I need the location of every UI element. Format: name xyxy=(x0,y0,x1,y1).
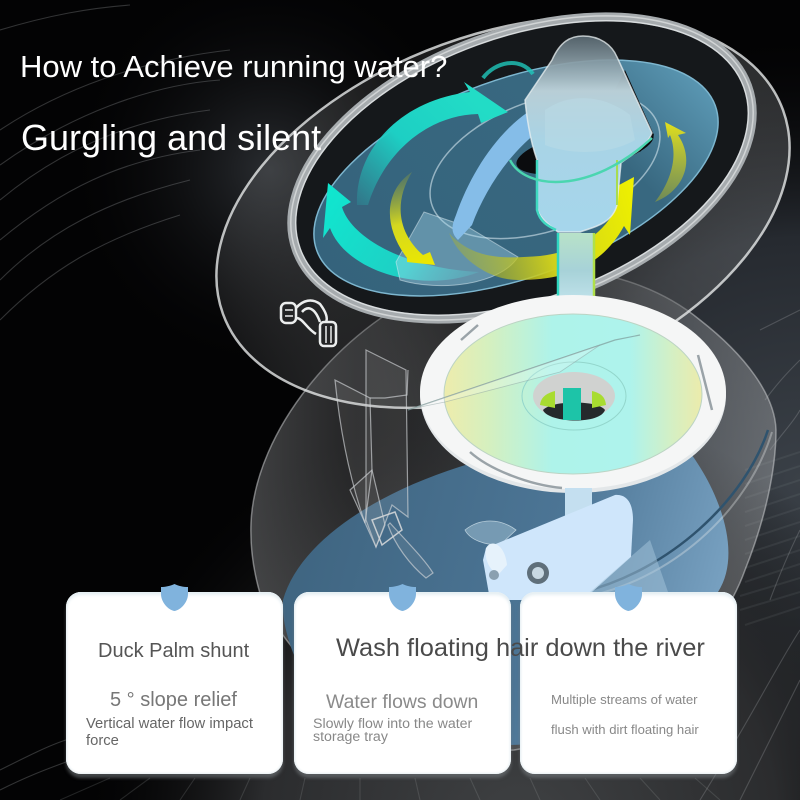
subtitle: Gurgling and silent xyxy=(21,117,321,158)
splash and outlet xyxy=(396,212,518,286)
white filter ring xyxy=(408,295,726,493)
card body: Slowly flow into the water xyxy=(313,716,472,732)
card body: force xyxy=(86,733,119,749)
card body line 1: Multiple streams of water xyxy=(551,692,698,707)
icon: shield xyxy=(615,584,642,611)
card body: Vertical water flow impact xyxy=(86,716,253,732)
panel: multiple streams xyxy=(520,592,737,774)
panel: duck palm shunt xyxy=(66,592,283,774)
card heading: Duck Palm shunt xyxy=(98,640,249,662)
blue water stream xyxy=(452,112,548,240)
upper transparent lid xyxy=(162,0,800,481)
yellow flow arrows xyxy=(390,122,686,280)
central valve xyxy=(510,36,658,232)
icon: shield xyxy=(161,584,188,611)
vertical pipe xyxy=(558,233,594,318)
card subheading: Water flows down xyxy=(326,691,478,713)
overlay heading: Wash floating hair down the river xyxy=(336,634,705,662)
card body: storage tray xyxy=(313,729,388,745)
card body xyxy=(313,716,472,745)
blue water plate xyxy=(283,12,749,344)
panel: water flows down xyxy=(294,592,511,774)
icon: shield xyxy=(389,584,416,611)
pump xyxy=(465,488,668,600)
teal flow arrows xyxy=(323,63,533,281)
title: How to Achieve running water? xyxy=(20,49,447,84)
card body xyxy=(86,716,253,749)
filter bracket xyxy=(335,350,433,578)
small clip xyxy=(281,301,336,346)
card body line 2: flush with dirt floating hair xyxy=(551,722,699,737)
card subheading: 5 ° slope relief xyxy=(110,689,237,711)
ring slots xyxy=(461,325,712,488)
lower transparent bowl xyxy=(251,269,776,750)
water in bowl xyxy=(283,440,728,745)
